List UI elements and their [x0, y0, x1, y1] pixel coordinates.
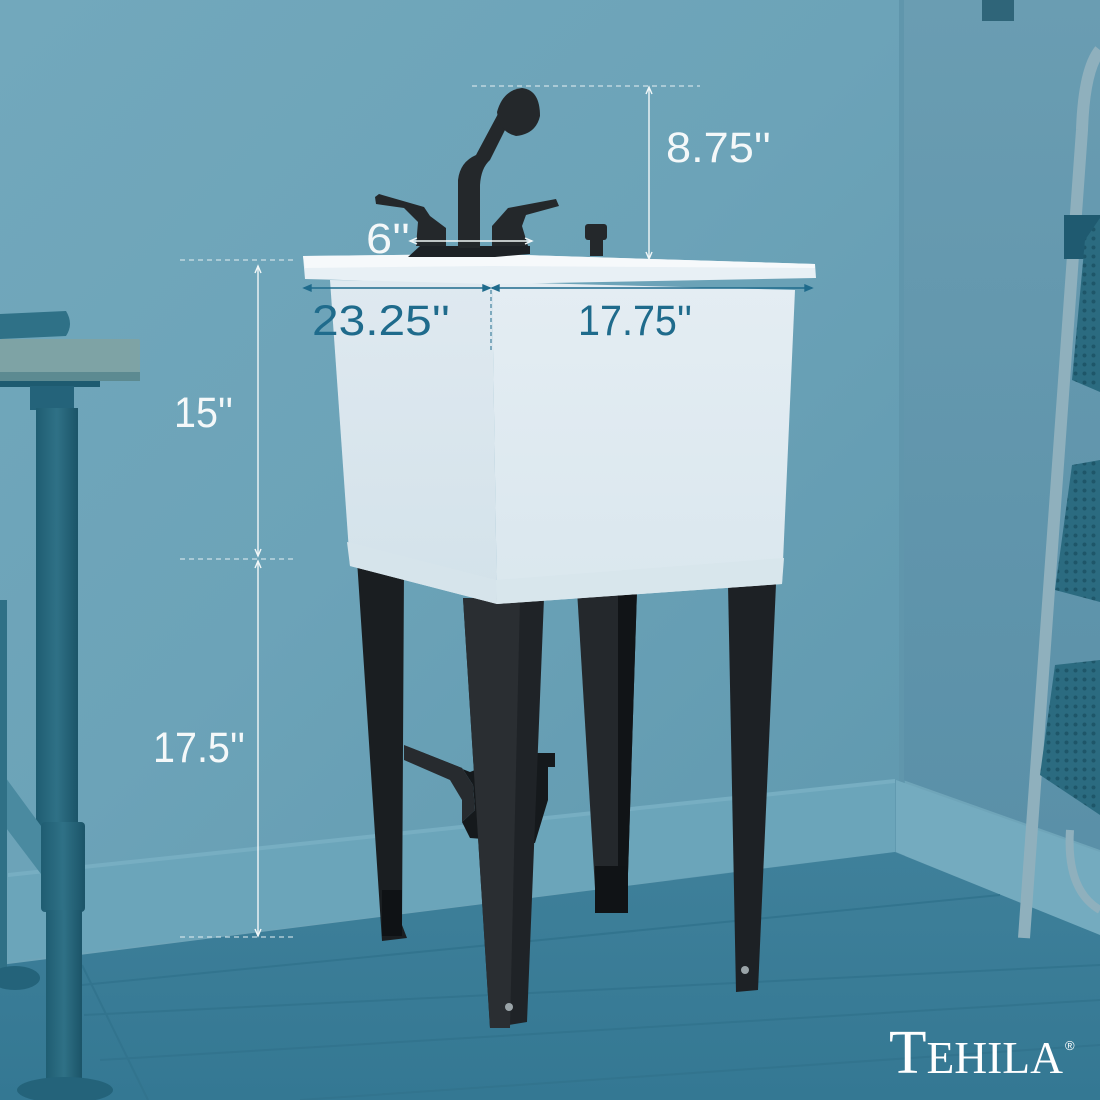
faucet [375, 88, 607, 256]
dimension guide lines [180, 86, 700, 937]
label: 23.25: 23.25'' [312, 297, 450, 345]
label: 17.5: 17.5'' [153, 724, 245, 772]
baseboard [8, 780, 895, 962]
arrow: 17.5 inch height [255, 561, 261, 936]
label: 8.75: 8.75'' [666, 124, 771, 172]
brand logo: TEHILA [889, 1019, 1063, 1087]
right step ladder [982, 0, 1100, 938]
arrow: 6 inch spread [410, 238, 532, 244]
sink front legs [463, 584, 776, 1028]
registered mark: ® [1065, 1038, 1075, 1053]
arrow: 23.25 inch width [304, 285, 490, 291]
left table with pipe leg [0, 311, 140, 1100]
floor [0, 852, 1100, 1100]
arrow: 17.75 inch width [492, 285, 812, 291]
sink basin [303, 246, 816, 604]
arrow: 15 inch height [255, 266, 261, 556]
arrow: 8.75 inch height [646, 87, 652, 259]
label: 6: 6'' [366, 215, 410, 263]
label: 15: 15'' [174, 389, 233, 437]
back drain pipe [404, 745, 555, 843]
sink back legs [357, 560, 637, 941]
label: 17.75: 17.75'' [578, 297, 692, 345]
